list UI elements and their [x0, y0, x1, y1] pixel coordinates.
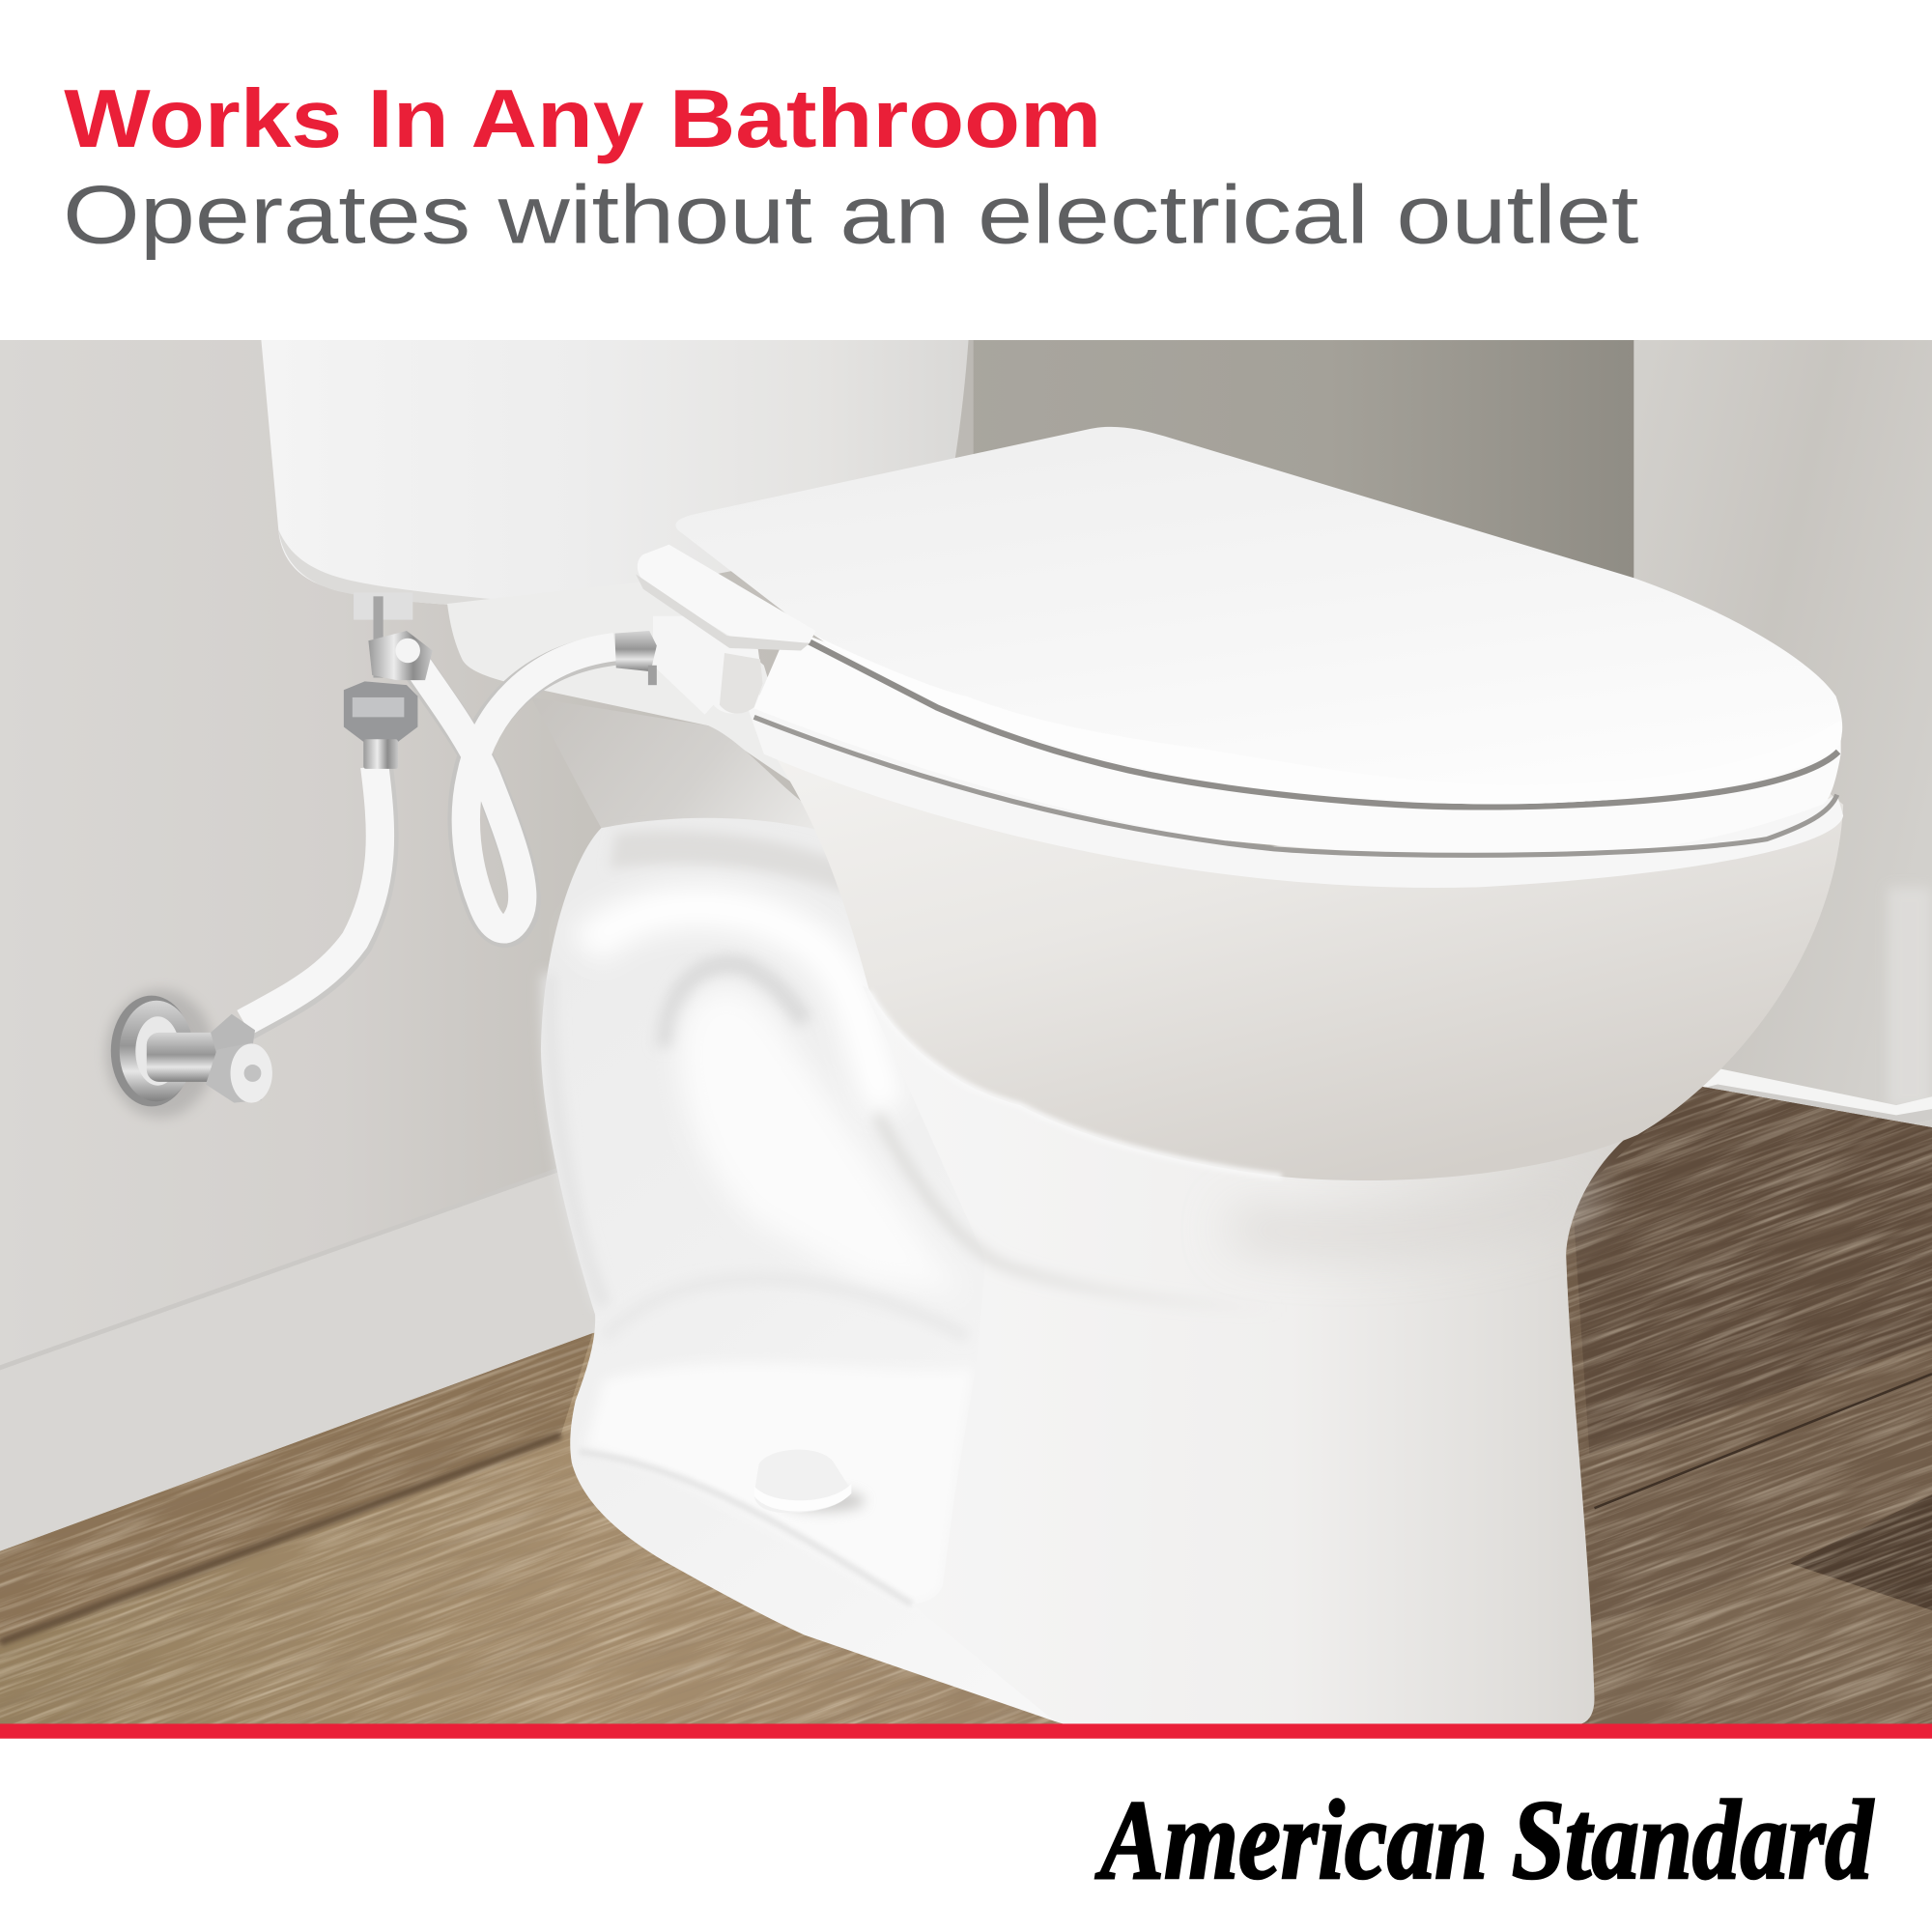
photo panel: toilet in bathroom — [0, 340, 1932, 1725]
hose: valve to T fitting — [244, 766, 383, 1025]
baseboard — [0, 1168, 616, 1555]
central lobe — [673, 993, 923, 1274]
drain bolt cap — [754, 1450, 865, 1513]
shut-off valve — [106, 989, 272, 1118]
pedestal crease shadow — [875, 1115, 1094, 1290]
left wall — [0, 340, 974, 1368]
heading block — [63, 73, 1639, 261]
gap between lid and ring — [807, 640, 1838, 807]
outer left edge shading — [550, 974, 604, 1306]
seat lid — [675, 427, 1842, 804]
top arm shading — [612, 831, 838, 891]
hose: T fitting to seat loop — [408, 647, 614, 931]
arm highlight — [585, 907, 887, 1109]
shaded underside of bowl — [578, 711, 814, 829]
subtitle: Operates without an electrical outlet — [63, 169, 1639, 261]
wood floor — [0, 1084, 1932, 1725]
T fitting — [344, 593, 433, 769]
bowl lower edge highlight — [868, 992, 1282, 1177]
bowl — [764, 739, 1843, 1180]
seat hose fitting — [614, 631, 657, 685]
tank — [261, 340, 969, 607]
base panel light — [595, 1370, 898, 1498]
back wall — [974, 340, 1638, 846]
red divider bar — [0, 1723, 1932, 1739]
neck and deck under tank — [447, 593, 790, 781]
right wall and cabinet — [1634, 340, 1932, 1128]
shadow under bowl — [1233, 1189, 1589, 1235]
bidet control bracket — [636, 545, 815, 715]
title: Works In Any Bathroom — [64, 73, 1101, 165]
seat ring — [754, 629, 1841, 856]
shelf crease — [604, 1279, 967, 1337]
swirl shadow — [667, 965, 804, 1047]
base lip — [579, 1452, 912, 1605]
gap between ring and rim — [754, 717, 1837, 855]
bowl rim — [739, 684, 1843, 888]
trapway — [537, 817, 1055, 1721]
pedestal — [1055, 1140, 1623, 1723]
